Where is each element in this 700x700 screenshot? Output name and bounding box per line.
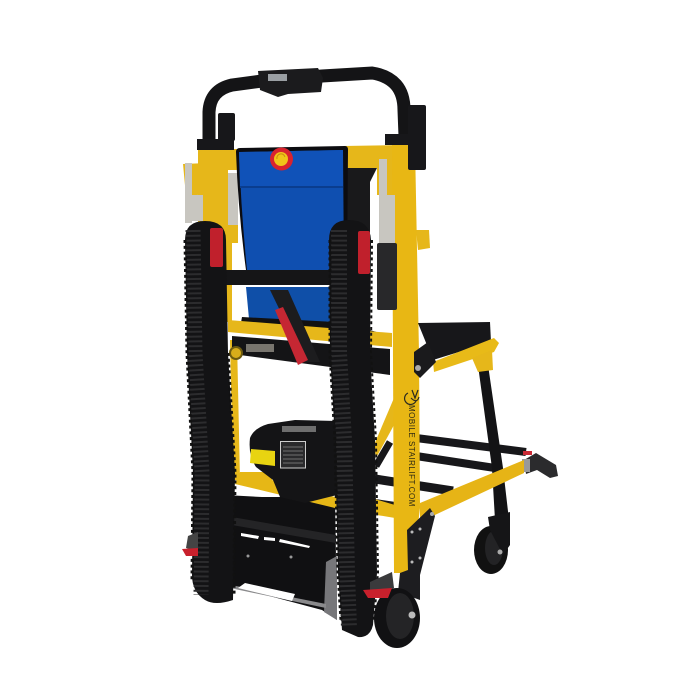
left silver slides <box>185 163 238 225</box>
right silver slides <box>379 159 395 243</box>
black slide grip <box>377 243 397 310</box>
lower yellow side rail <box>420 460 524 522</box>
left crawler track <box>185 221 235 603</box>
battery support frame <box>235 472 395 518</box>
rear lower black tubes <box>375 438 526 506</box>
red emergency stop knob <box>270 148 293 170</box>
front leg <box>477 358 509 520</box>
left handle socket and grip <box>197 113 235 150</box>
black cross handle bar <box>210 270 345 285</box>
red track covers <box>210 228 370 274</box>
diagonal yellow brace <box>374 398 394 458</box>
cross mechanism under seat <box>230 290 390 375</box>
brand text: MOBILE STAIRLIFT.COM <box>407 405 416 507</box>
lower black bracket <box>398 508 435 600</box>
front caster wheel <box>474 512 510 574</box>
right yellow upright with brand text <box>392 145 420 573</box>
logo mark <box>405 390 419 404</box>
front main wheel <box>374 588 420 648</box>
black seat back support <box>345 168 386 345</box>
right handle socket and grip <box>385 105 426 170</box>
yellow cross bar under seat back <box>228 320 392 347</box>
rear grip handle <box>522 451 558 478</box>
blue seat back panel <box>236 146 348 335</box>
right brake pedal <box>363 572 394 598</box>
battery pack <box>250 420 337 503</box>
motor and drive unit <box>225 495 337 620</box>
seat pad <box>414 322 499 378</box>
handle display unit <box>258 68 323 97</box>
left brake pedal <box>182 532 198 556</box>
seat back frame: yellow top bar and left upright <box>183 145 430 480</box>
right crawler track <box>329 220 378 637</box>
upper handle bar <box>209 73 405 140</box>
